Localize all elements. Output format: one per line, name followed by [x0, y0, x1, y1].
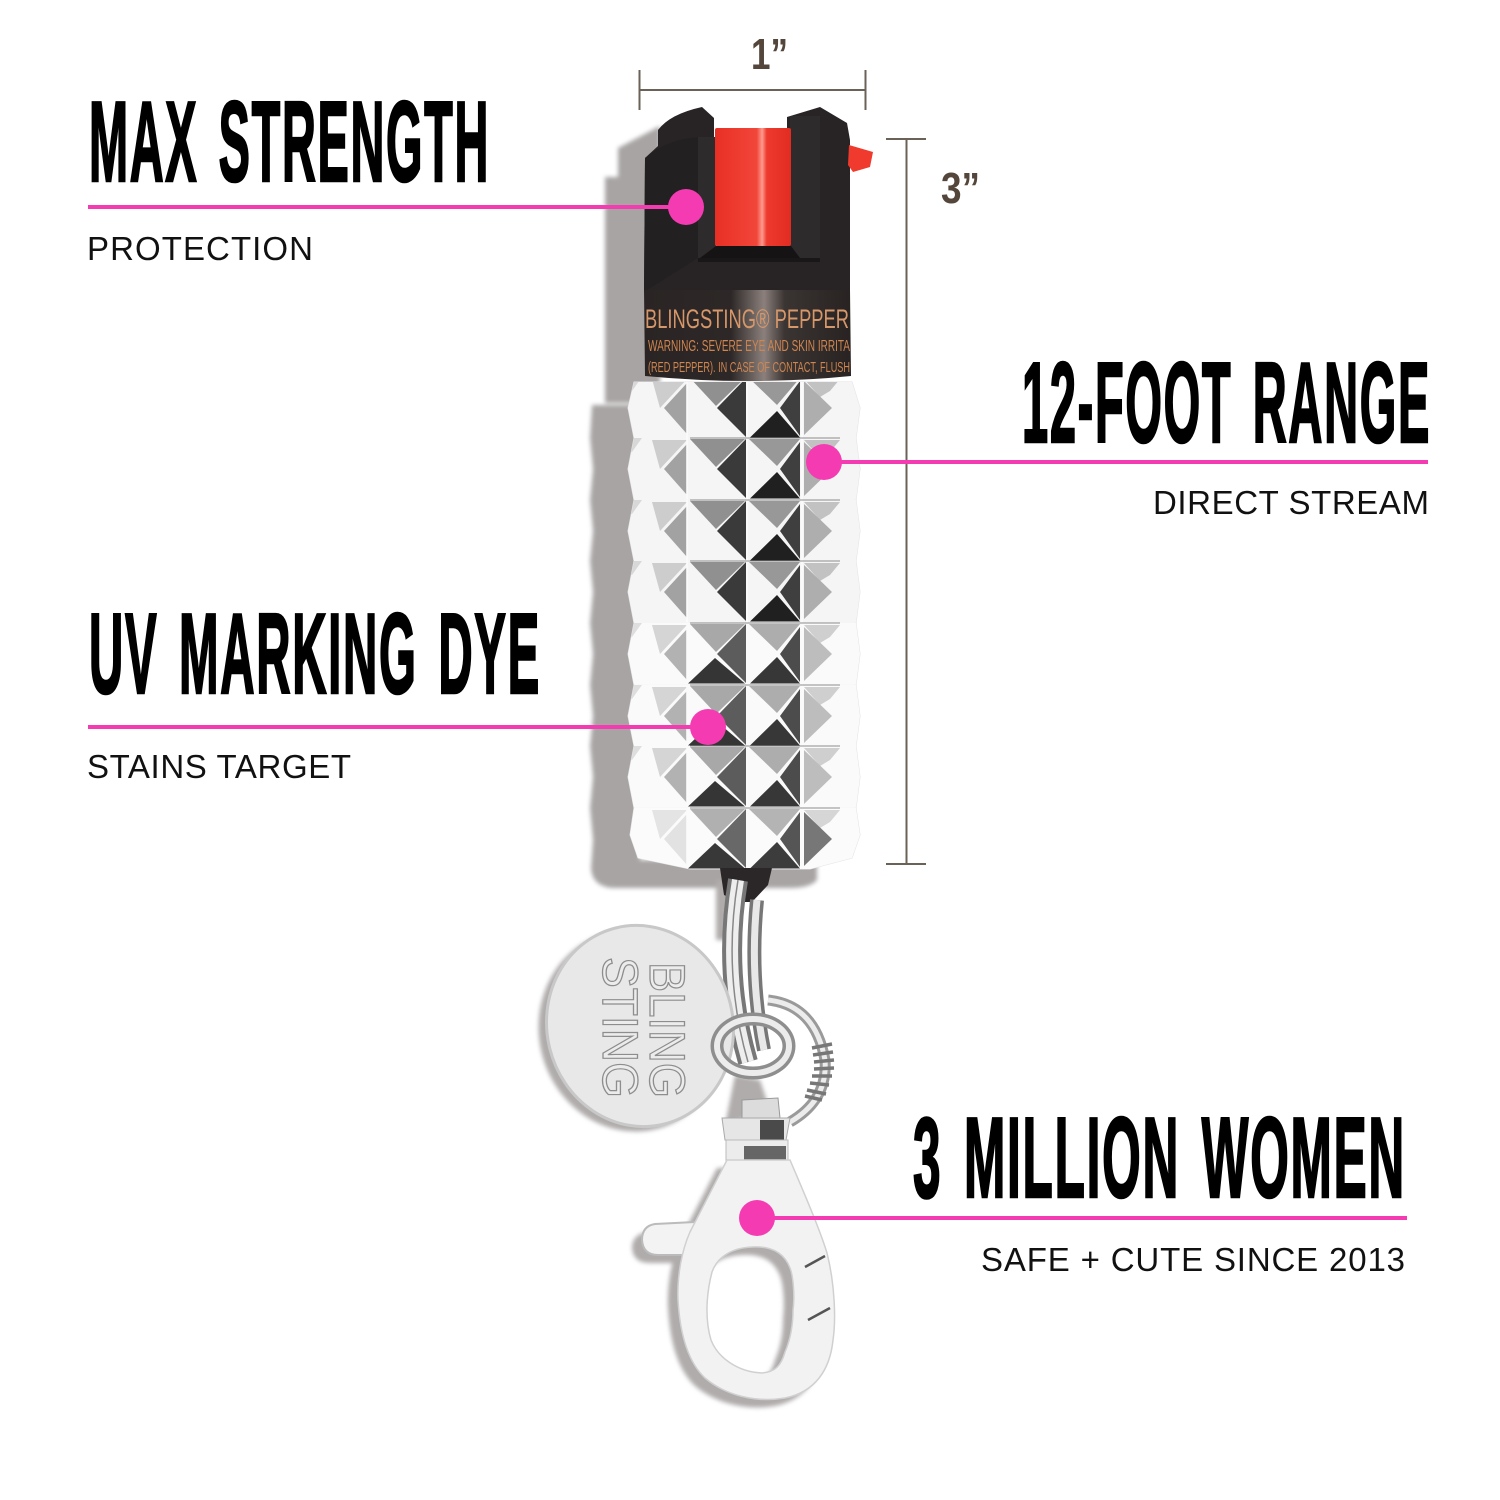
callout: 3 million women [739, 1095, 1407, 1278]
swivel head [722, 1098, 790, 1162]
callout: uv marking dye: UV MARKING DYE [89, 591, 541, 718]
key ring [720, 868, 772, 1062]
product: pepper spray keychain [517, 107, 873, 1407]
label band: WARNING: SEVERE EYE AND SKIN IRRITA [648, 338, 850, 355]
product shadow [590, 126, 817, 888]
label band: (RED PEPPER). IN CASE OF CONTACT, FLUSH [648, 359, 850, 376]
callout: 12-foot range [806, 340, 1431, 521]
callout: uv marking dye [87, 591, 726, 785]
dimension: height: 3” [941, 164, 980, 213]
clasp thumb nub [642, 1222, 695, 1255]
jump ring [717, 1019, 789, 1073]
swivel ring [768, 1000, 825, 1122]
round charm: BLING [639, 962, 695, 1098]
coil [805, 1044, 834, 1100]
red actuator [715, 128, 791, 246]
round charm: STING [592, 957, 648, 1098]
swivel ring highlight [768, 1000, 825, 1122]
callout: uv marking dye: STAINS TARGET [87, 748, 351, 785]
clasp [642, 1160, 835, 1399]
callout: max strength: PROTECTION [87, 230, 313, 267]
clasp body [678, 1160, 835, 1399]
black cap [644, 107, 873, 381]
red safety tab [848, 145, 873, 172]
dimension: width: 1” [751, 30, 788, 79]
studded body [626, 377, 862, 870]
ring and charm shadows [517, 880, 825, 1407]
dimension: width [639, 30, 866, 110]
round charm [525, 906, 755, 1146]
callout: 3 million women: SAFE + CUTE SINCE 2013 [981, 1241, 1405, 1278]
label band [644, 290, 851, 381]
label band: BLINGSTING® PEPPER [645, 304, 849, 334]
jump ring highlight [717, 1019, 789, 1073]
callout: max strength: MAX STRENGTH [89, 79, 490, 206]
callout: max strength [87, 79, 704, 267]
dimension: height [886, 139, 980, 864]
callout: 12-foot range: DIRECT STREAM [1153, 484, 1429, 521]
